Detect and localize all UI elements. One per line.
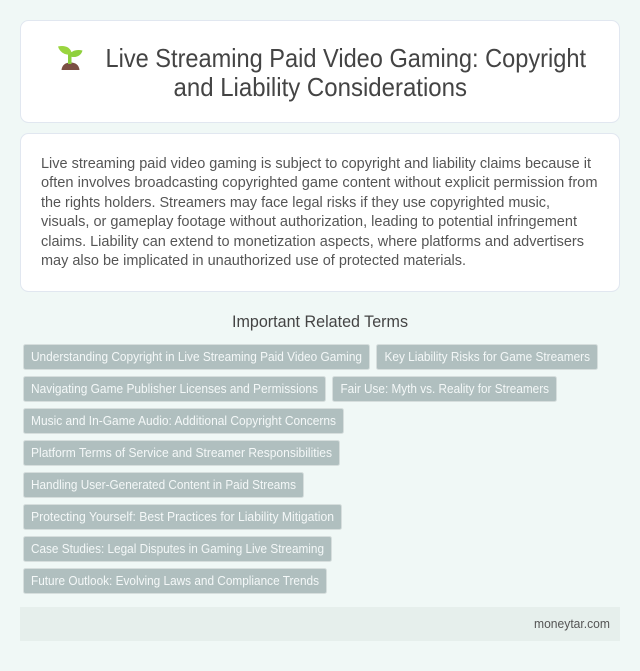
panel: description card [20,134,620,292]
title: and Liability Considerations [174,72,467,102]
text block: description [41,155,598,269]
tag: fair use [332,376,556,402]
text block: description: often involves broadcasting copyrighted game content without explicit permission from [41,174,598,191]
tag: music and audio: Music and In-Game Audio: Additional Copyright Concerns [31,414,336,428]
tag: publisher licenses: Navigating Game Publisher Licenses and Permissions [31,382,318,396]
tag list: related terms [24,344,598,594]
tag: future outlook [24,568,326,594]
panel: header card [20,20,620,122]
tag: protecting yourself: Protecting Yourself: Best Practices for Liability Mitigation [31,510,334,524]
tag: platform terms [24,440,340,466]
tag: user-generated content [24,472,304,498]
tag: understanding copyright: Understanding Copyright in Live Streaming Paid Video Gaming [31,350,362,364]
text block: description: may also be implicated in unauthorized use of protected materials. [41,252,466,269]
tag: understanding copyright [24,344,370,370]
tag: key liability risks [376,344,598,370]
tag: future outlook: Future Outlook: Evolving Laws and Compliance Trends [31,574,319,588]
text block: description: claims. Liability can extend to monetization aspects, where platforms and advertisers [41,233,584,250]
tag: user-generated content: Handling User-Generated Content in Paid Streams [31,478,296,492]
title: Live Streaming Paid Video Gaming: Copyright [106,43,587,73]
footer source text: moneytar.com [534,617,610,631]
tag: key liability risks: Key Liability Risks for Game Streamers [384,350,590,364]
tag: protecting yourself [24,504,342,530]
text block: description: Live streaming paid video gaming is subject to copyright and liability claims because it [41,155,592,172]
heading: important related terms: Important Related Terms [232,313,408,331]
text block: description: the rights holders. Streamers may face legal risks if they use copyrighted music, [41,194,550,211]
icon: seedling [58,46,82,70]
tag: publisher licenses [24,376,326,402]
tag: music and audio [24,408,344,434]
text block: description: visuals, or gameplay footage without authorization, leading to potential infringement [41,213,578,230]
tag: case studies [24,536,332,562]
footer [20,607,620,641]
title [106,43,587,102]
tag: case studies: Case Studies: Legal Disputes in Gaming Live Streaming [31,542,324,556]
tag: fair use: Fair Use: Myth vs. Reality for Streamers [340,382,549,396]
tag: platform terms: Platform Terms of Service and Streamer Responsibilities [31,446,332,460]
